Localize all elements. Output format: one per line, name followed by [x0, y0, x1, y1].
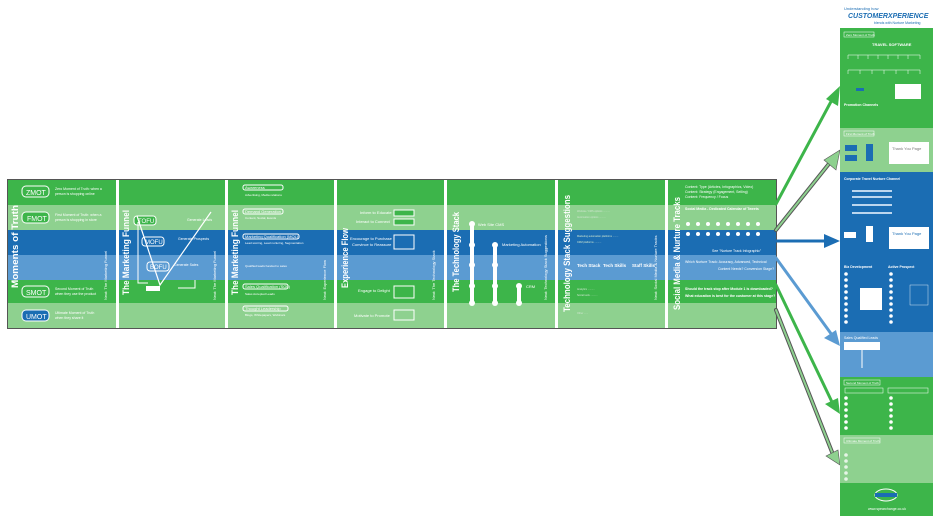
header: CUSTOMERXPERIENCE: [848, 13, 929, 20]
panel: technology stack suggestions: [562, 195, 658, 315]
section light green: Thank You Page: [892, 146, 922, 151]
panel: marketing funnel 2: Qualified leads handed to sales: [245, 264, 287, 268]
section light blue: [840, 332, 933, 377]
panel: marketing funnel 2: Blogs, Whitepapers, Webinars: [245, 313, 286, 317]
panel: experience flow: [340, 210, 436, 320]
panel: technology stack: The Technology Stack: [451, 211, 461, 292]
section light green: [840, 128, 933, 172]
section blue: [840, 172, 933, 332]
panel: marketing funnel 2: Lead scoring, Lead nurturing, Segmentation: [245, 241, 304, 245]
section green 2: [840, 377, 933, 435]
panel: social media and nurture tracks: Should the track stop after Module 1 is downloaded?: [685, 287, 773, 291]
panel: marketing funnel 1: Generate Prospects: [178, 237, 209, 241]
panel: technology stack suggestions: Website / CMS options ..........: [577, 210, 610, 213]
panel: experience flow: Engage to Delight: [358, 288, 391, 293]
section blue: Active Prospect: [888, 265, 915, 269]
panel: moments of truth: person is shopping in store: [55, 218, 97, 222]
panel: technology stack suggestions: Social tools ..........: [577, 294, 598, 297]
section green 2: Second Moment of Truth: [846, 381, 879, 385]
panel: social media and nurture tracks: Content Needs? Conversion Stage?: [718, 267, 774, 271]
panel: technology stack suggestions: Tech Stack: [577, 263, 601, 268]
panel: moments of truth: when they use the product: [55, 292, 96, 296]
panel: moments of truth: FMOT: [27, 216, 48, 223]
panel: technology stack suggestions: Analytics ..........: [577, 288, 595, 291]
panel: experience flow: Convince to Reassure: [352, 242, 392, 247]
panel: moments of truth: Next: The Marketing Funnel: [103, 251, 108, 300]
section blue: Thank You Page: [892, 231, 922, 236]
panel: technology stack suggestions: Other ......: [577, 312, 588, 315]
panel: social media and nurture tracks: What education is best for the customer at this stage?: [685, 294, 775, 298]
panel: marketing funnel 2: Sales Accepted Leads: [245, 292, 275, 296]
panel: marketing funnel 2: Next: Experience Flow: [322, 260, 327, 300]
section blue: Corporate Travel Nurture Channel: [844, 177, 900, 181]
panel: experience flow: Inform to Educate: [360, 210, 392, 215]
header: blends with Nurture Marketing: [874, 21, 921, 25]
panel: experience flow: Experience Flow: [340, 227, 350, 288]
panel: technology stack: Marketing Automation: [502, 242, 541, 247]
left strip: journey panels: [7, 179, 777, 329]
section green: [840, 28, 933, 128]
panel: marketing funnel 1: Generate Sales: [174, 263, 199, 267]
panel: marketing funnel 1: TOFU: [138, 219, 154, 225]
panel: marketing funnel 2: The Marketing Funnel: [230, 210, 240, 295]
panel: social media and nurture tracks: Social Media & Nurture Tracks: [672, 197, 682, 310]
section green: Zero Moment of Truth: [846, 33, 875, 37]
header: Understanding how: [844, 6, 879, 11]
panel: technology stack suggestions: Tech Skills: [603, 263, 627, 268]
panel: moments of truth: Zero Moment of Truth: when a: [55, 187, 102, 191]
panel: technology stack suggestions: Next: Social Media & Nurture Tracks: [653, 236, 658, 300]
panel: social media and nurture tracks: Content: Strategy (Engagement, Selling): [685, 190, 748, 194]
panel: moments of truth: UMOT: [26, 314, 47, 321]
panel: moments of truth: SMOT: [26, 290, 47, 297]
panel: marketing funnel 1: MOFU: [145, 240, 163, 246]
right strip: customer experience column: [840, 5, 933, 516]
panel: marketing funnel 2: Content, Social, Events: [245, 216, 277, 220]
panel: marketing funnel 2: Marketing Qualification (MQL): [245, 234, 299, 239]
panel: marketing funnel 1: [121, 210, 217, 300]
panel: marketing funnel 2: Awareness: [245, 185, 265, 190]
panel: marketing funnel 2: Thought Leadership: [245, 306, 281, 311]
footer logo: www.spearchange.co.uk: [868, 507, 906, 511]
panel: technology stack: [451, 211, 548, 306]
panel: social media and nurture tracks: See "Nurture Track Infographic": [712, 249, 762, 253]
panel: moments of truth: [10, 186, 108, 321]
panel: technology stack suggestions: Marketing automation platforms ........: [577, 235, 619, 238]
section blue: Biz Development: [844, 265, 873, 269]
header: [840, 5, 933, 28]
panel: technology stack suggestions: Staff Skills: [632, 263, 656, 268]
panel: social media and nurture tracks: Content: Frequency / Focus: [685, 195, 728, 199]
panel: technology stack: Next: Technology Stack Suggestions: [543, 235, 548, 300]
panel: social media and nurture tracks: Which Nurture Track: Accuracy, Advanced, Technical: [685, 260, 767, 264]
section green: Promotion Channels: [844, 103, 878, 107]
panel: social media and nurture tracks: Social Media - Dedicated Calendar of Tweets: [685, 207, 759, 211]
section light green 2: [840, 435, 933, 483]
panel: moments of truth: Second Moment of Truth: [55, 287, 93, 291]
panel: moments of truth: person is shopping online: [55, 192, 95, 196]
panel: marketing funnel 1: BOFU: [150, 265, 167, 271]
section light blue: Sales Qualified Leads: [844, 336, 878, 340]
section green: TRAVEL SOFTWARE: [872, 42, 912, 47]
panel: moments of truth: ZMOT: [26, 190, 47, 197]
panel: marketing funnel 2: Advertising, Media relations: [245, 193, 282, 197]
panel: technology stack suggestions: Automation options ..........: [577, 216, 606, 219]
panel: marketing funnel 1: Generate Leads: [187, 218, 212, 222]
footer logo: [840, 483, 933, 516]
panel: experience flow: Interact to Connect: [356, 219, 391, 224]
section light green: First Moment of Truth: [846, 132, 875, 136]
panel: moments of truth: Moments of Truth: [10, 205, 20, 288]
panel: marketing funnel 1: Next: The Marketing Funnel: [212, 251, 217, 300]
panel: moments of truth: Ultimate Moment of Truth: [55, 311, 94, 315]
arrows: [776, 86, 840, 465]
panel: experience flow: Motivate to Promote: [354, 313, 391, 318]
panel: technology stack suggestions: Technology Stack Suggestions: [562, 195, 572, 312]
panel: technology stack suggestions: CRM platforms ..........: [577, 241, 602, 244]
panel: marketing funnel 2: [230, 185, 327, 317]
panel: social media and nurture tracks: Content: Type (Articles, Infographics, Video): [685, 185, 753, 189]
section light green 2: Ultimate Moment of Truth: [846, 439, 880, 443]
panel: social media and nurture tracks: [672, 185, 775, 310]
panel: experience flow: Encourage to Purchase: [350, 236, 393, 241]
panel: moments of truth: First Moment of Truth: when a: [55, 213, 102, 217]
panel: technology stack: CRM: [526, 284, 535, 289]
panel: marketing funnel 2: Sales Qualification (SQL): [245, 284, 291, 289]
panel: marketing funnel 1: The Marketing Funnel: [121, 210, 131, 295]
panel: technology stack: Web Site CMS: [478, 222, 504, 227]
panel: marketing funnel 2: Demand Generation: [245, 209, 281, 214]
panel: experience flow: Next: The Technology Stack: [431, 250, 436, 300]
panel: moments of truth: when they share it: [55, 316, 83, 320]
